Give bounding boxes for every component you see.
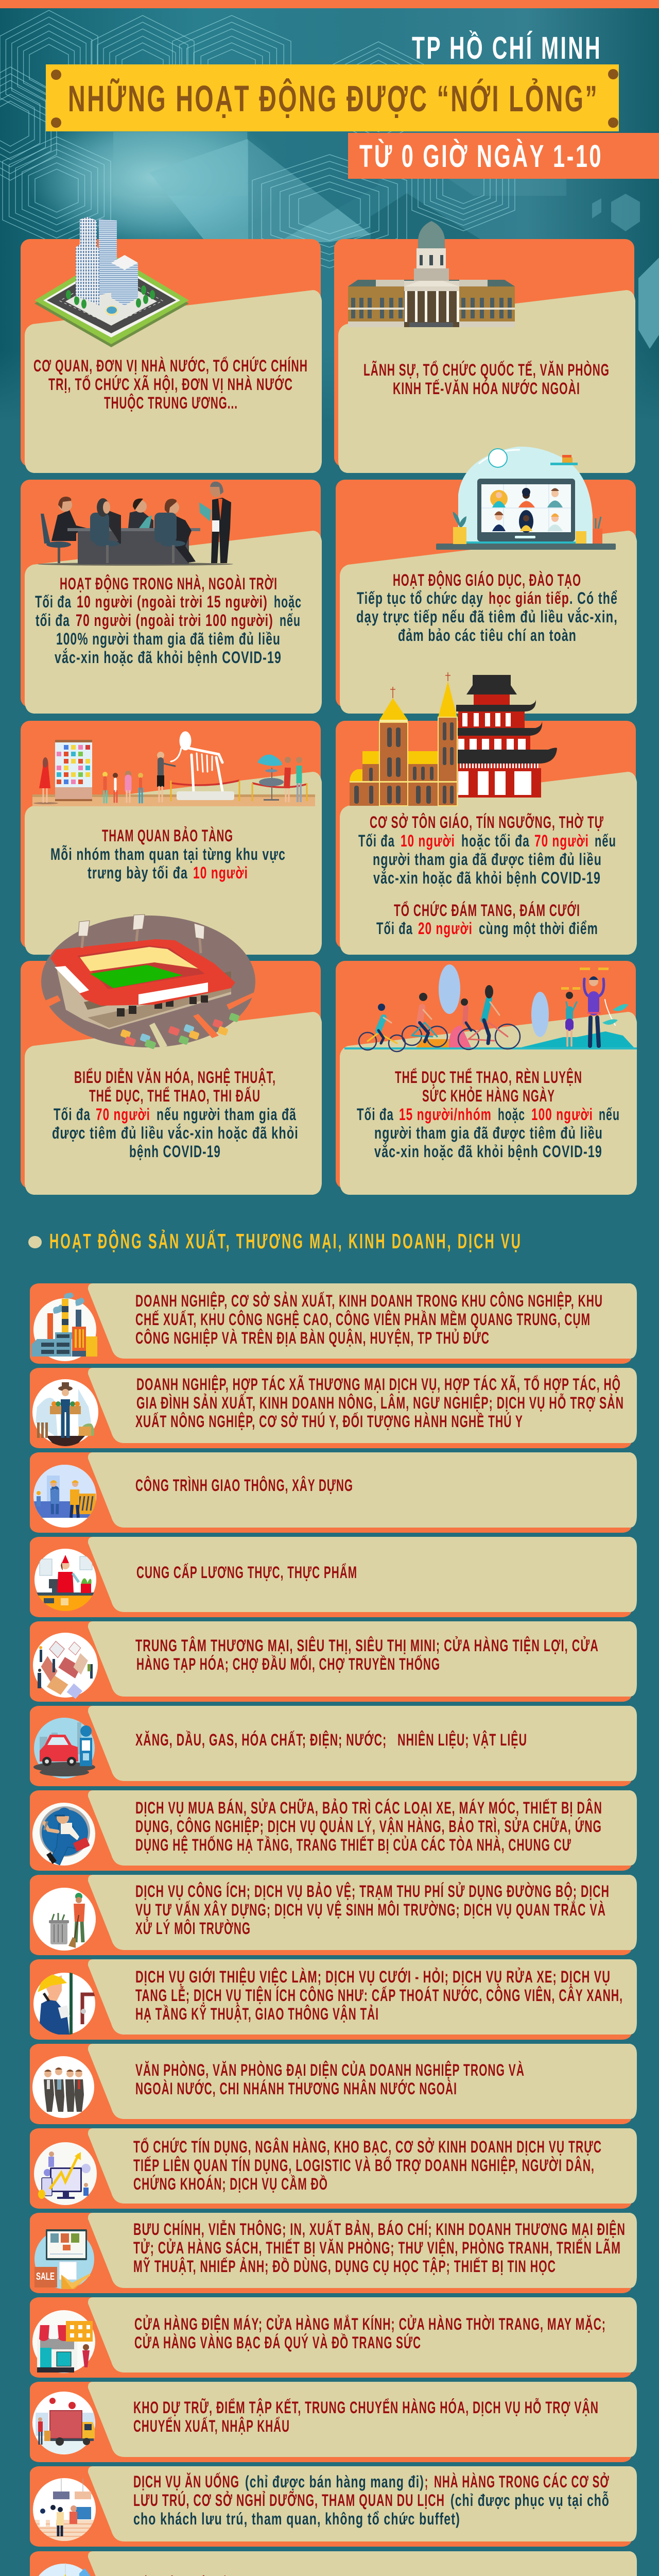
panel: state agencies xyxy=(21,217,322,473)
panel text xyxy=(33,357,308,412)
panel text: 70 người (ngoài trời 100 người) xyxy=(76,611,273,630)
item text: cho khách lưu trú, tham quan, không tổ chức buffet) xyxy=(133,2510,460,2528)
panel text: 100 người xyxy=(531,1105,593,1124)
list item: offices xyxy=(30,2044,637,2124)
illustration: meeting xyxy=(38,482,233,566)
panel text: 70 người xyxy=(96,1105,150,1124)
panel text: nếu xyxy=(280,611,301,630)
icon: store floor plan xyxy=(33,1633,98,1700)
item text xyxy=(133,2220,626,2276)
icon: salon xyxy=(32,2563,95,2576)
list item: employment and utilities xyxy=(30,1959,637,2040)
panel text: THỂ DỤC, THỂ THAO, THI ĐẤU xyxy=(89,1087,261,1105)
panel text: cùng một thời điểm xyxy=(479,919,598,938)
panel text: 15 người/nhóm xyxy=(399,1105,492,1124)
panel: performances and sports events xyxy=(21,914,322,1195)
panel text: BIỂU DIỄN VĂN HÓA, NGHỆ THUẬT, xyxy=(74,1068,276,1087)
item text: CÔNG NGHIỆP VÀ TRÊN ĐỊA BÀN QUẬN, HUYỆN, TP THỦ ĐỨC xyxy=(135,1329,490,1347)
title banner xyxy=(46,64,619,131)
panel text: bệnh COVID-19 xyxy=(129,1142,221,1161)
panel: indoor and outdoor activities xyxy=(21,480,322,714)
icon: mechanic xyxy=(32,1803,95,1866)
panel: daily exercise xyxy=(336,961,637,1195)
icon: shop xyxy=(32,2310,95,2373)
panel text: THUỘC TRUNG ƯƠNG... xyxy=(104,394,238,412)
panel text: Tối đa xyxy=(54,1105,91,1124)
panel text: Tiếp tục tổ chức dạy xyxy=(357,589,483,607)
panel text: THAM QUAN BẢO TÀNG xyxy=(102,826,233,845)
item text xyxy=(133,2138,602,2193)
panel: education xyxy=(336,447,637,714)
illustration: cyclists and exercise xyxy=(344,964,637,1052)
item text xyxy=(135,2061,525,2098)
list item: banking and logistics xyxy=(30,2128,637,2209)
panel: religious establishments xyxy=(336,672,637,955)
panel text: 20 người xyxy=(418,919,473,938)
panel text xyxy=(356,571,618,645)
panel text: 10 người (ngoài trời 15 người) xyxy=(77,592,268,611)
list item: construction xyxy=(30,1452,637,1533)
panel text: 10 người xyxy=(193,863,248,882)
panel text: Tối đa xyxy=(35,592,72,611)
icon: online sale xyxy=(34,2229,94,2289)
item text: DỊCH VỤ ĂN UỐNG xyxy=(133,2472,239,2491)
icon: cashier xyxy=(34,1549,97,1612)
panel text: vắc-xin hoặc đã khỏi bệnh COVID-19 xyxy=(55,648,282,667)
panel text: tối đa xyxy=(36,611,70,630)
list item: hair salons xyxy=(30,2551,637,2576)
panel text: Tối đa xyxy=(376,919,413,938)
item text: CỬA HÀNG VÀNG BẠC ĐÁ QUÝ VÀ ĐỒ TRANG SỨC xyxy=(134,2333,421,2352)
list item: retail stores xyxy=(30,2297,637,2378)
item text xyxy=(135,1799,602,1854)
panel text: SỨC KHỎE HÀNG NGÀY xyxy=(422,1087,555,1105)
item text xyxy=(133,2398,599,2435)
panel text: HOẠT ĐỘNG TRONG NHÀ, NGOÀI TRỜI xyxy=(60,574,278,593)
panel text: nếu xyxy=(595,832,616,850)
list item: commerce xyxy=(30,1621,637,1702)
panel text xyxy=(50,826,286,882)
list item: post and media xyxy=(30,2213,637,2293)
item text: CUNG CẤP LƯƠNG THỰC, THỰC PHẨM xyxy=(136,1563,357,1582)
panel text: 70 người xyxy=(534,832,589,850)
panel text xyxy=(358,813,616,938)
panel text: Tối đa xyxy=(357,1105,394,1124)
item text xyxy=(135,1636,599,1673)
icon: online sale: SALE xyxy=(36,2271,55,2282)
list item: warehouses and transport xyxy=(30,2382,637,2462)
panel text: CƠ QUAN, ĐƠN VỊ NHÀ NƯỚC, TỔ CHỨC CHÍNH xyxy=(33,357,308,375)
list item: food supply xyxy=(30,1537,637,1617)
list item: cooperatives and agriculture xyxy=(30,1368,637,1448)
panel text xyxy=(35,574,302,667)
illustration: pagoda and church xyxy=(350,672,557,806)
panel text: được tiêm đủ liều vắc-xin hoặc đã khỏi xyxy=(52,1124,299,1142)
item text xyxy=(135,1968,623,2023)
icon: farmer xyxy=(32,1379,98,1446)
list item: public services xyxy=(30,1875,637,1955)
list item: food service xyxy=(30,2466,637,2547)
illustration: city block xyxy=(34,217,189,347)
list item: fuel and utilities xyxy=(30,1706,637,1786)
item text: CHUYỂN XUẤT, NHẬP KHẨU xyxy=(133,2417,290,2435)
icon: gas station xyxy=(33,1718,95,1778)
list item: industrial enterprises xyxy=(30,1283,637,1364)
item text xyxy=(135,1292,603,1347)
icon: delivery truck xyxy=(32,2392,95,2454)
item text: LƯU TRÚ, CƠ SỞ NGHỈ DƯỠNG, THAM QUAN DU LỊCH xyxy=(133,2491,445,2510)
icon: utility engineer xyxy=(33,1972,95,2035)
item text xyxy=(135,1375,624,1431)
illustration: colonial building xyxy=(348,221,515,327)
panel text: nếu người tham gia đã xyxy=(157,1105,297,1124)
panel text: trưng bày tối đa xyxy=(88,863,188,882)
panel text xyxy=(363,361,610,398)
item text: (chỉ được bán hàng mang đi) xyxy=(245,2472,424,2491)
illustration: online classroom xyxy=(436,447,616,550)
item text: NGOÀI NƯỚC, CHI NHÁNH THƯƠNG NHÂN NƯỚC NGOÀI xyxy=(135,2079,457,2098)
item text: HẠ TẦNG KỸ THUẬT, GIAO THÔNG VẬN TẢI xyxy=(135,2005,379,2023)
panel text: . Có thể xyxy=(569,589,618,607)
icon: businessmen xyxy=(32,2056,94,2118)
panel text: nếu xyxy=(599,1105,620,1124)
panel text xyxy=(357,1068,620,1161)
illustration: museum visit xyxy=(32,732,315,806)
icon: street cleaner xyxy=(33,1888,96,1951)
item text xyxy=(134,2315,606,2352)
top bar xyxy=(0,0,659,8)
panel text: hoặc tối đa xyxy=(461,832,530,850)
panel: museums xyxy=(21,721,322,955)
list item: repair services xyxy=(30,1790,637,1871)
icon: factory xyxy=(31,1293,97,1361)
panel text xyxy=(52,1068,299,1161)
panel text: Tối đa xyxy=(358,832,395,850)
panel text: Mỗi nhóm tham quan tại từng khu vực xyxy=(50,845,286,863)
item text: ; xyxy=(425,2472,428,2491)
panel text: 10 người xyxy=(401,832,455,850)
item text xyxy=(133,2472,610,2528)
panel text: hoặc xyxy=(498,1105,525,1124)
icon: construction workers xyxy=(33,1465,96,1528)
icon: finance xyxy=(34,2142,97,2205)
panel text: đảm bảo các tiêu chí an toàn xyxy=(398,626,577,645)
item text: CÔNG TRÌNH GIAO THÔNG, XÂY DỰNG xyxy=(135,1476,353,1495)
icon: restaurant xyxy=(33,2478,96,2541)
item text xyxy=(135,1882,610,1938)
panel text: TRỊ, TỔ CHỨC XÃ HỘI, ĐƠN VỊ NHÀ NƯỚC xyxy=(48,375,293,394)
item text: HÀNG TẠP HÓA; CHỢ ĐẦU MỐI, CHỢ TRUYỀN THỐNG xyxy=(136,1655,440,1673)
item text: CHỨNG KHOÁN; DỊCH VỤ CẦM ĐỒ xyxy=(133,2175,328,2193)
panel text: hoặc xyxy=(274,592,302,611)
illustration: stadium xyxy=(40,914,255,1049)
item text: XỬ LÝ MÔI TRƯỜNG xyxy=(135,1919,251,1938)
panel text: 100% người tham gia đã tiêm đủ liều xyxy=(56,630,281,648)
panel text: học gián tiếp xyxy=(489,589,569,607)
panel: consulates xyxy=(334,221,635,473)
